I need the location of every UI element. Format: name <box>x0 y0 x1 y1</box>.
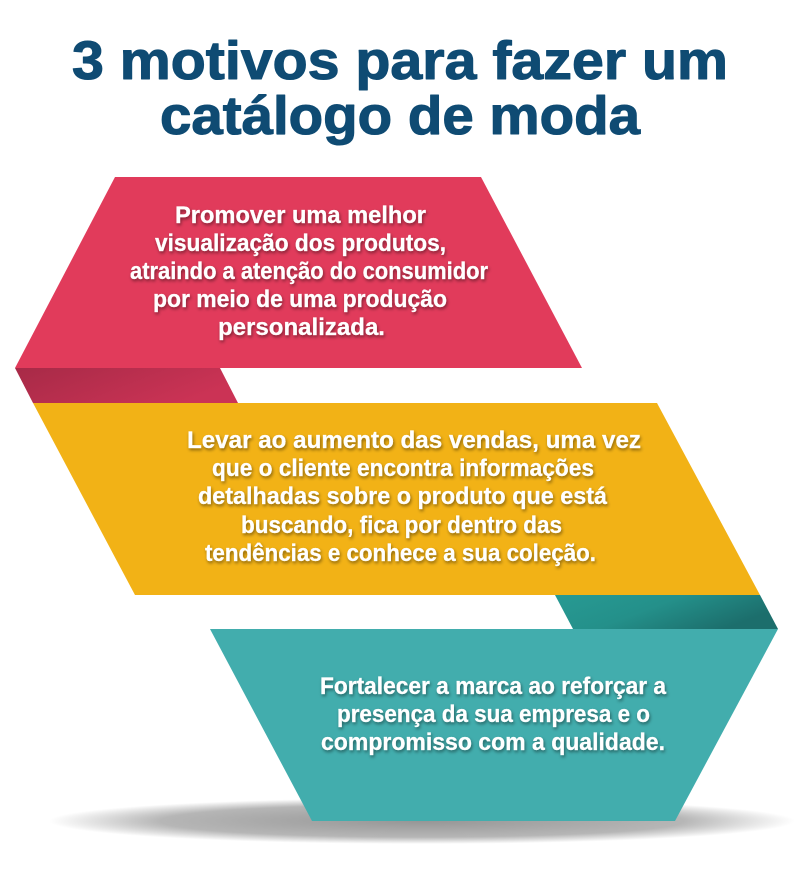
teal text: Fortalecer a marca ao reforçar a <box>320 673 667 700</box>
yellow text: Levar ao aumento das vendas, uma vez <box>187 427 641 454</box>
title: catálogo de moda <box>160 86 641 146</box>
panel: red reason 1 <box>15 177 582 403</box>
teal text: compromisso com a qualidade. <box>321 729 665 756</box>
panel: yellow reason 2 <box>33 403 760 595</box>
teal shape <box>210 629 778 821</box>
title: 3 motivos para fazer um <box>72 31 728 91</box>
yellow text <box>187 427 641 567</box>
teal fold <box>555 595 778 629</box>
title <box>72 31 728 146</box>
yellow shape <box>33 403 760 595</box>
red text: visualização dos produtos, <box>155 230 446 257</box>
red fold <box>15 368 238 403</box>
floor shadow <box>49 798 795 844</box>
teal text: presença da sua empresa e o <box>337 701 650 728</box>
yellow text: tendências e conhece a sua coleção. <box>205 540 596 567</box>
teal text <box>320 673 667 756</box>
panel: teal reason 3 <box>210 595 778 821</box>
red text: Promover uma melhor <box>175 202 426 229</box>
red text: atraindo a atenção do consumidor <box>130 258 488 285</box>
red text: por meio de uma produção <box>153 286 447 313</box>
red text: personalizada. <box>218 314 385 341</box>
red text <box>130 202 488 341</box>
yellow text: buscando, fica por dentro das <box>241 512 562 539</box>
red shape <box>15 177 582 368</box>
yellow text: detalhadas sobre o produto que está <box>198 483 608 510</box>
yellow text: que o cliente encontra informações <box>212 455 594 482</box>
